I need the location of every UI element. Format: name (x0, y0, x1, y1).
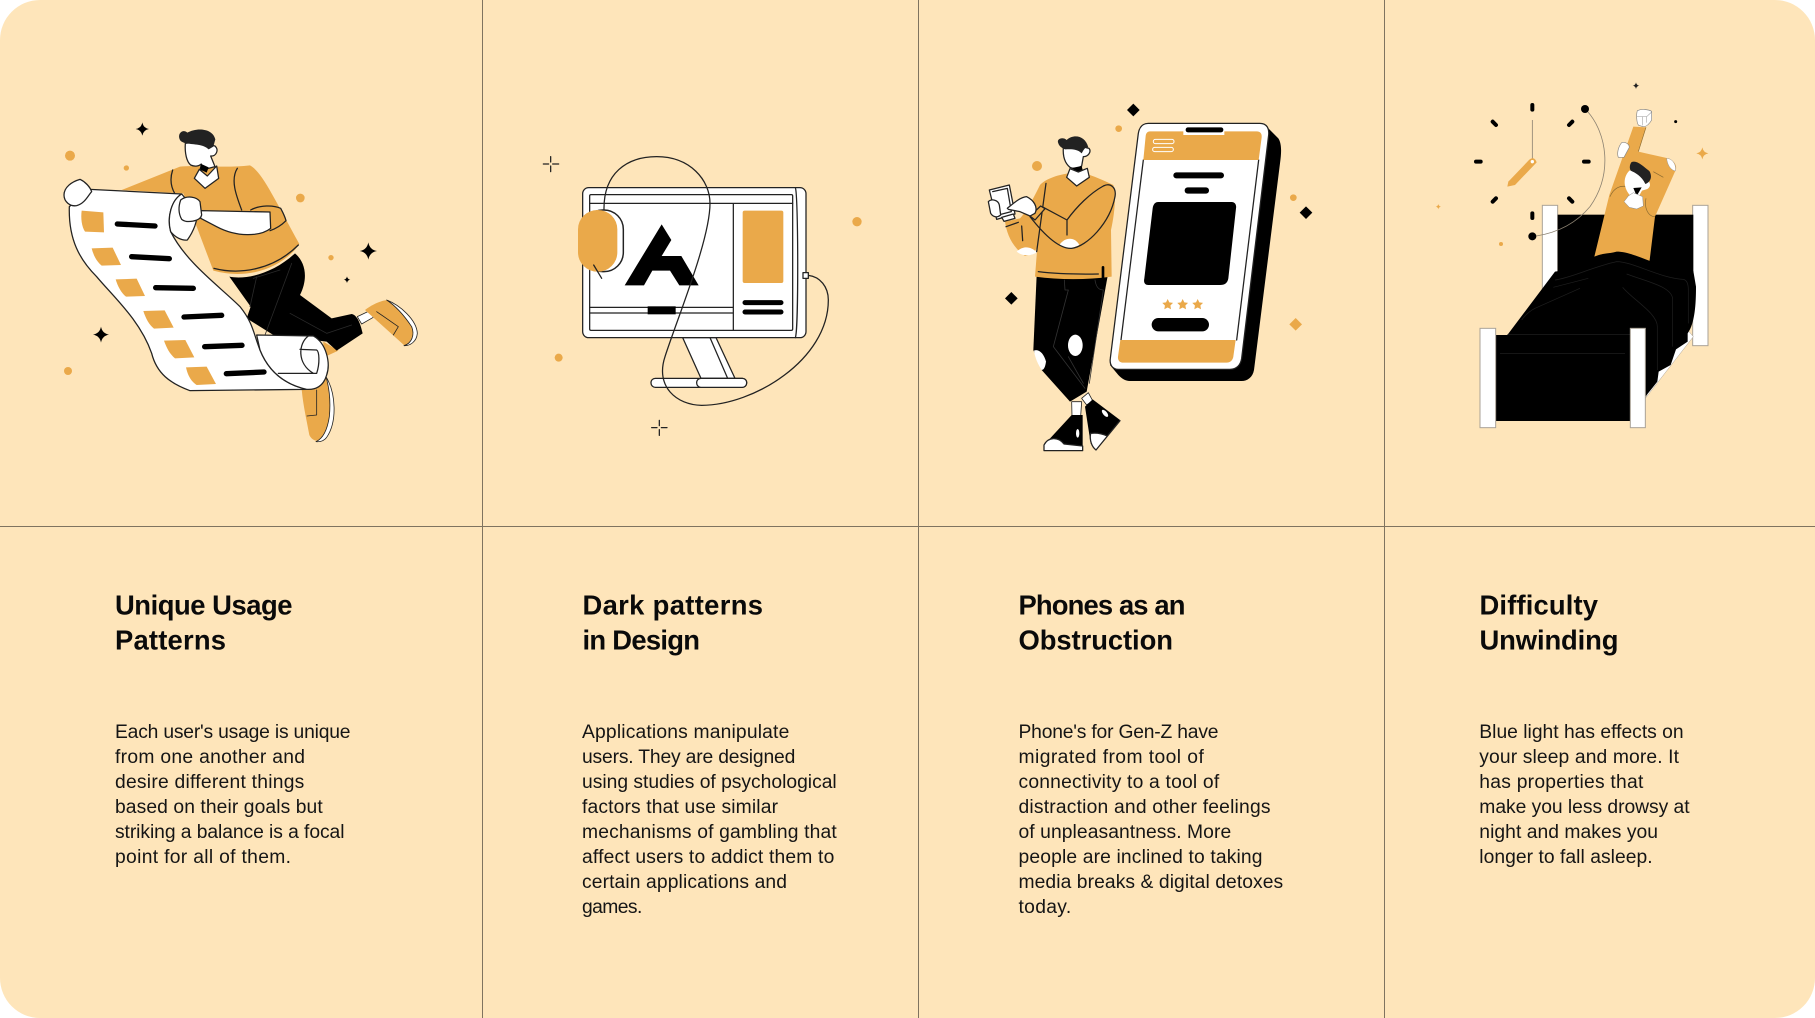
icon: decorative sparkles and dots (64, 122, 377, 375)
text block: phones description: Phone's for Gen-Z have (1018, 722, 1218, 743)
icon: monitor frame and screen (583, 188, 806, 338)
text block: dark patterns description: factors that use similar (582, 797, 779, 818)
text block: unwinding description: has properties that (1479, 772, 1644, 793)
icon: phone image placeholder (1144, 202, 1236, 285)
text block: dark patterns description: users. They are designed (582, 747, 795, 768)
text block: dark patterns description: mechanisms of gambling that (582, 822, 837, 843)
icon: phone button (1152, 318, 1209, 331)
text block: unwinding description: make you less drowsy at (1479, 797, 1690, 818)
icon: clock hands (1507, 120, 1537, 187)
text block: phones description: people are inclined to taking (1018, 847, 1262, 868)
icon: upper shoe (357, 300, 417, 346)
text block: phones description: distraction and other feelings (1018, 797, 1270, 818)
text block: dark patterns description (582, 722, 837, 918)
text block: unique usage description: Each user's usage is unique (115, 722, 350, 743)
heading: dark patterns (582, 590, 763, 656)
icon: head (179, 129, 219, 188)
icon: decorative crosshairs and dots (543, 157, 862, 435)
icon: top roll of scroll (169, 194, 197, 240)
icon: sweater line details (171, 168, 298, 271)
panel: dark patterns in design (483, 0, 918, 1018)
text block: unique usage description: desire different things (115, 772, 304, 793)
icon: lower shoe (302, 342, 338, 442)
icon: trousers (229, 253, 363, 351)
text block: unwinding description (1479, 722, 1690, 868)
icon: wire connector (803, 273, 808, 278)
icon: bed headboard posts (1542, 205, 1708, 346)
heading: phones as an obstruction: Obstruction (1018, 624, 1173, 656)
icon: phone front (1110, 123, 1269, 369)
text block: phones description (1018, 722, 1283, 918)
icon: orange sidebar card (743, 211, 783, 283)
heading: unique usage patterns (115, 590, 292, 656)
text block: dark patterns description: affect users to addict them to (582, 847, 834, 868)
icon: phone text pills (1173, 172, 1224, 194)
heading: difficulty unwinding (1480, 590, 1618, 656)
heading: difficulty unwinding: Unwinding (1480, 624, 1618, 656)
text block: dark patterns description: certain applications and (582, 872, 787, 893)
icon: phone bottom bar (1118, 340, 1236, 363)
text block: phones description: of unpleasantness. More (1018, 822, 1231, 843)
text block: dark patterns description: using studies of psychological (582, 772, 837, 793)
heading: difficulty unwinding: Difficulty (1480, 590, 1599, 620)
icon: blanket folds (1522, 262, 1688, 370)
icon: hands (64, 179, 202, 221)
text block: phones description: media breaks & digital detoxes (1018, 872, 1283, 893)
icon: decorative sparkles (1436, 82, 1708, 246)
icon: blanket (1507, 252, 1696, 403)
text block: unwinding description: longer to fall asleep. (1479, 847, 1653, 868)
icon: scroll list rows (81, 211, 264, 385)
heading: dark patterns: in Design (582, 624, 700, 656)
text block: unwinding description: Blue light has effects on (1479, 722, 1684, 743)
icon: sidebar text lines (745, 303, 781, 312)
illustration: monitor with headphones (543, 157, 862, 435)
icon: sweater (122, 165, 299, 274)
heading: unique usage patterns: Unique Usage (115, 590, 292, 620)
text block: unwinding description: night and makes you (1479, 822, 1658, 843)
icon: phone screen edge lines (1121, 160, 1259, 340)
icon: arc between clock dots (1528, 105, 1605, 240)
icon: trouser seams (250, 263, 352, 335)
icon: paper scroll (69, 189, 307, 391)
text block: unique usage description: striking a balance is a focal (115, 822, 344, 843)
icon: hand holding small phone (988, 185, 1045, 221)
icon: decorative diamonds and dots (1005, 104, 1312, 331)
text block: dark patterns description: Applications manipulate (582, 722, 789, 743)
icon: headphone cup (578, 210, 623, 278)
text block: unique usage description: point for all of them. (115, 847, 291, 868)
icon: trousers (1033, 275, 1108, 402)
icon: sweater details (1610, 127, 1663, 217)
icon: white forearm (201, 211, 271, 235)
text block: phones description: connectivity to a tool of (1018, 772, 1220, 793)
heading: phones as an obstruction (1018, 590, 1186, 656)
text block: unwinding description: your sleep and more. It (1479, 747, 1680, 768)
icon: cuffs and hands (1618, 109, 1676, 171)
icon: footboard (1480, 328, 1645, 428)
icon: clock ticks (1474, 103, 1591, 220)
text block: phones description: migrated from tool of (1018, 747, 1204, 768)
illustration: man beside a giant phone (988, 104, 1312, 451)
text block: unique usage description (115, 722, 350, 868)
panel: phones as an obstruction (919, 0, 1384, 1018)
text block: phones description: today. (1018, 897, 1071, 918)
icon: logo letter mark (625, 224, 699, 285)
panel: unique usage patterns (0, 0, 482, 1018)
icon: head (1058, 136, 1090, 186)
icon: phone body shadow (1110, 123, 1281, 381)
heading: phones as an obstruction: Phones as an (1018, 590, 1186, 620)
icon: monitor stand (651, 338, 747, 387)
text block: unique usage description: based on their goals but (115, 797, 323, 818)
text block: dark patterns description: games. (582, 897, 642, 918)
icon: white sheet edge (1645, 330, 1693, 398)
panel: difficulty unwinding (1385, 0, 1815, 1018)
icon: phone top bar (1143, 127, 1262, 160)
icon: bottom roll of scroll (257, 335, 328, 389)
icon: sneakers (1044, 399, 1120, 451)
icon: head (1624, 162, 1651, 209)
illustration: man stretching in bed with a clock (1436, 82, 1708, 428)
heading: dark patterns: Dark patterns (582, 590, 763, 620)
icon: three rating stars (1162, 299, 1203, 309)
illustration: man holding a long scroll (64, 122, 417, 442)
icon: sweater (1594, 127, 1676, 263)
icon: headphone wire (604, 157, 828, 405)
icon: sweater details (1006, 183, 1115, 279)
heading: unique usage patterns: Patterns (115, 624, 226, 656)
text block: unique usage description: from one another and (115, 747, 305, 768)
icon: sweater (1005, 173, 1115, 279)
icon: socks (1072, 393, 1093, 416)
